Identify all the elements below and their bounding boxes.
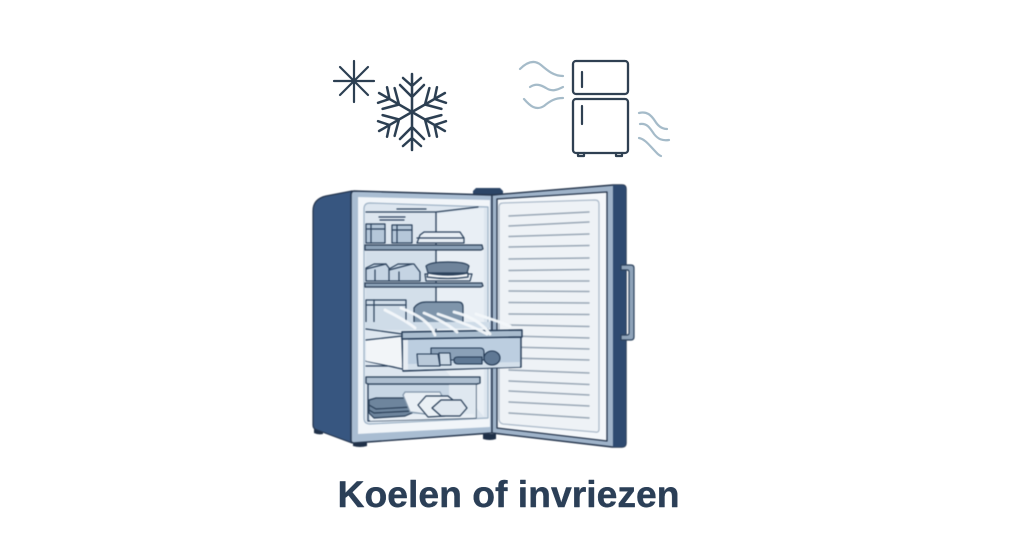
lower basket — [366, 377, 480, 421]
inner frame — [358, 197, 490, 434]
icon: air waves left — [520, 62, 563, 108]
open freezer illustration — [313, 185, 634, 447]
items on third shelf — [366, 300, 463, 324]
drawer rim — [402, 330, 522, 339]
jars on top shelf — [366, 217, 412, 243]
icon: air waves right — [639, 112, 669, 156]
basket rim — [366, 377, 480, 384]
shelf 2 — [365, 283, 483, 287]
title: Koelen of invriezen — [338, 474, 680, 515]
shelf above drawer — [365, 322, 490, 330]
drawer — [402, 330, 522, 371]
icon: large snowflake — [373, 74, 451, 150]
top shelf line — [366, 207, 478, 330]
freezer feet — [314, 427, 496, 447]
open door — [492, 185, 634, 447]
door handle — [621, 265, 634, 340]
frozen food packs — [369, 392, 467, 418]
door white liner — [497, 192, 607, 441]
freezer side wall — [313, 191, 352, 443]
drawer rails — [366, 329, 402, 369]
wrapped items on second shelf — [366, 262, 472, 281]
fridge lower compartment — [573, 99, 628, 153]
drawer body — [402, 337, 521, 371]
interior shading — [437, 208, 484, 417]
door outer frame — [492, 185, 626, 447]
door ribs — [509, 212, 589, 418]
stacked containers on top shelf — [417, 232, 464, 243]
drawer food — [417, 348, 500, 366]
interior back wall — [364, 203, 488, 424]
icon: small snowflake — [334, 61, 374, 102]
shelf 1 — [365, 245, 483, 250]
top hinge — [473, 188, 503, 195]
icon: small fridge — [573, 61, 628, 156]
fridge freezer compartment — [573, 61, 628, 94]
freezer front frame — [351, 191, 492, 443]
basket body — [368, 384, 476, 421]
cold air streaks — [385, 308, 510, 335]
fridge handles and feet — [578, 72, 622, 156]
door edge — [613, 185, 626, 447]
door inner panel — [499, 200, 599, 432]
